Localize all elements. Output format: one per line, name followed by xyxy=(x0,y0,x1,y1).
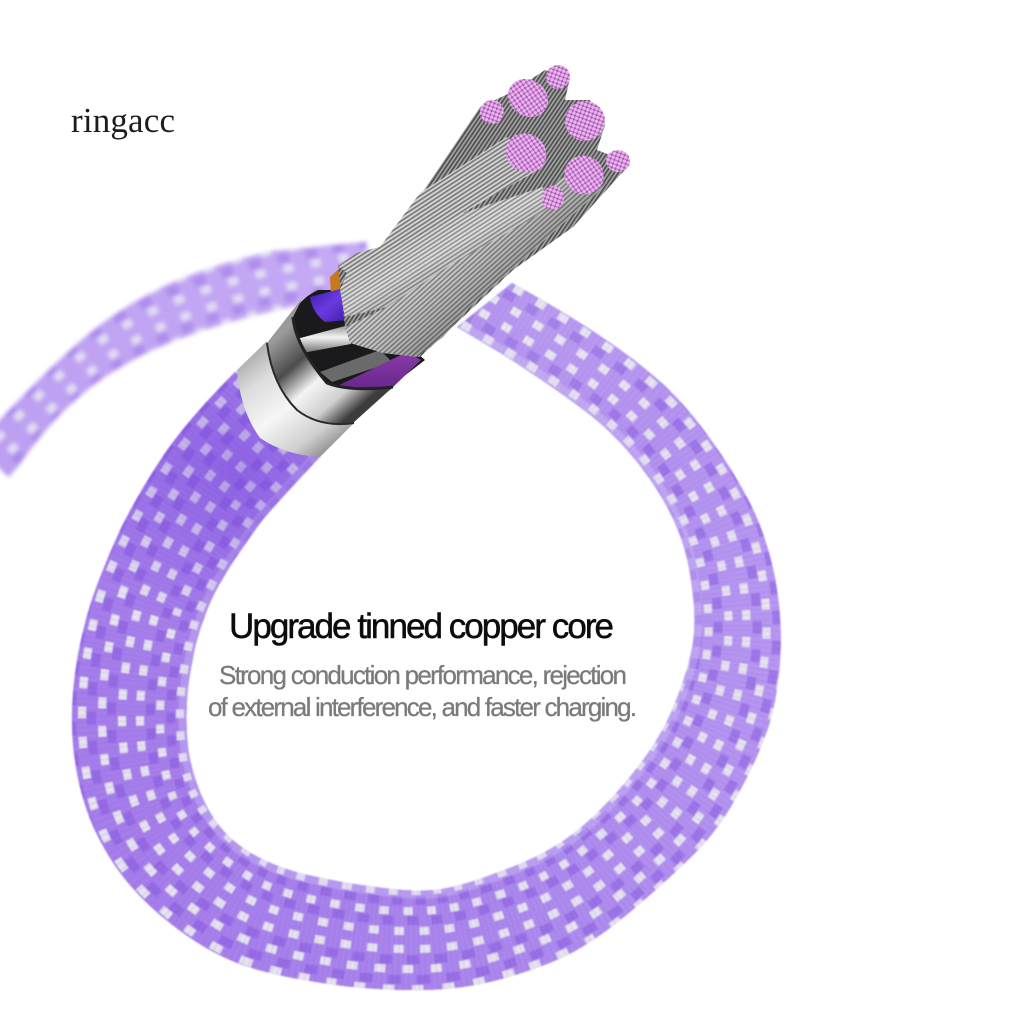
description text: Strong conduction performance, rejection xyxy=(219,660,627,690)
rear insulated wires inside connector xyxy=(292,266,425,404)
infographic canvas xyxy=(0,65,782,991)
metal connector collar xyxy=(237,297,393,457)
description text: of external interference, and faster charging. xyxy=(208,692,637,722)
copper strands: twisted front bundles xyxy=(338,137,607,357)
wire cross-section tips xyxy=(480,65,630,210)
braided cable: rear left section xyxy=(0,262,370,460)
heading: Upgrade tinned copper core xyxy=(229,607,614,646)
description text xyxy=(208,660,637,722)
copper strands: wire bundle silhouette and rear wires xyxy=(338,70,630,357)
brand wordmark: ringacc xyxy=(71,101,175,140)
braided cable: main loop xyxy=(71,282,782,991)
